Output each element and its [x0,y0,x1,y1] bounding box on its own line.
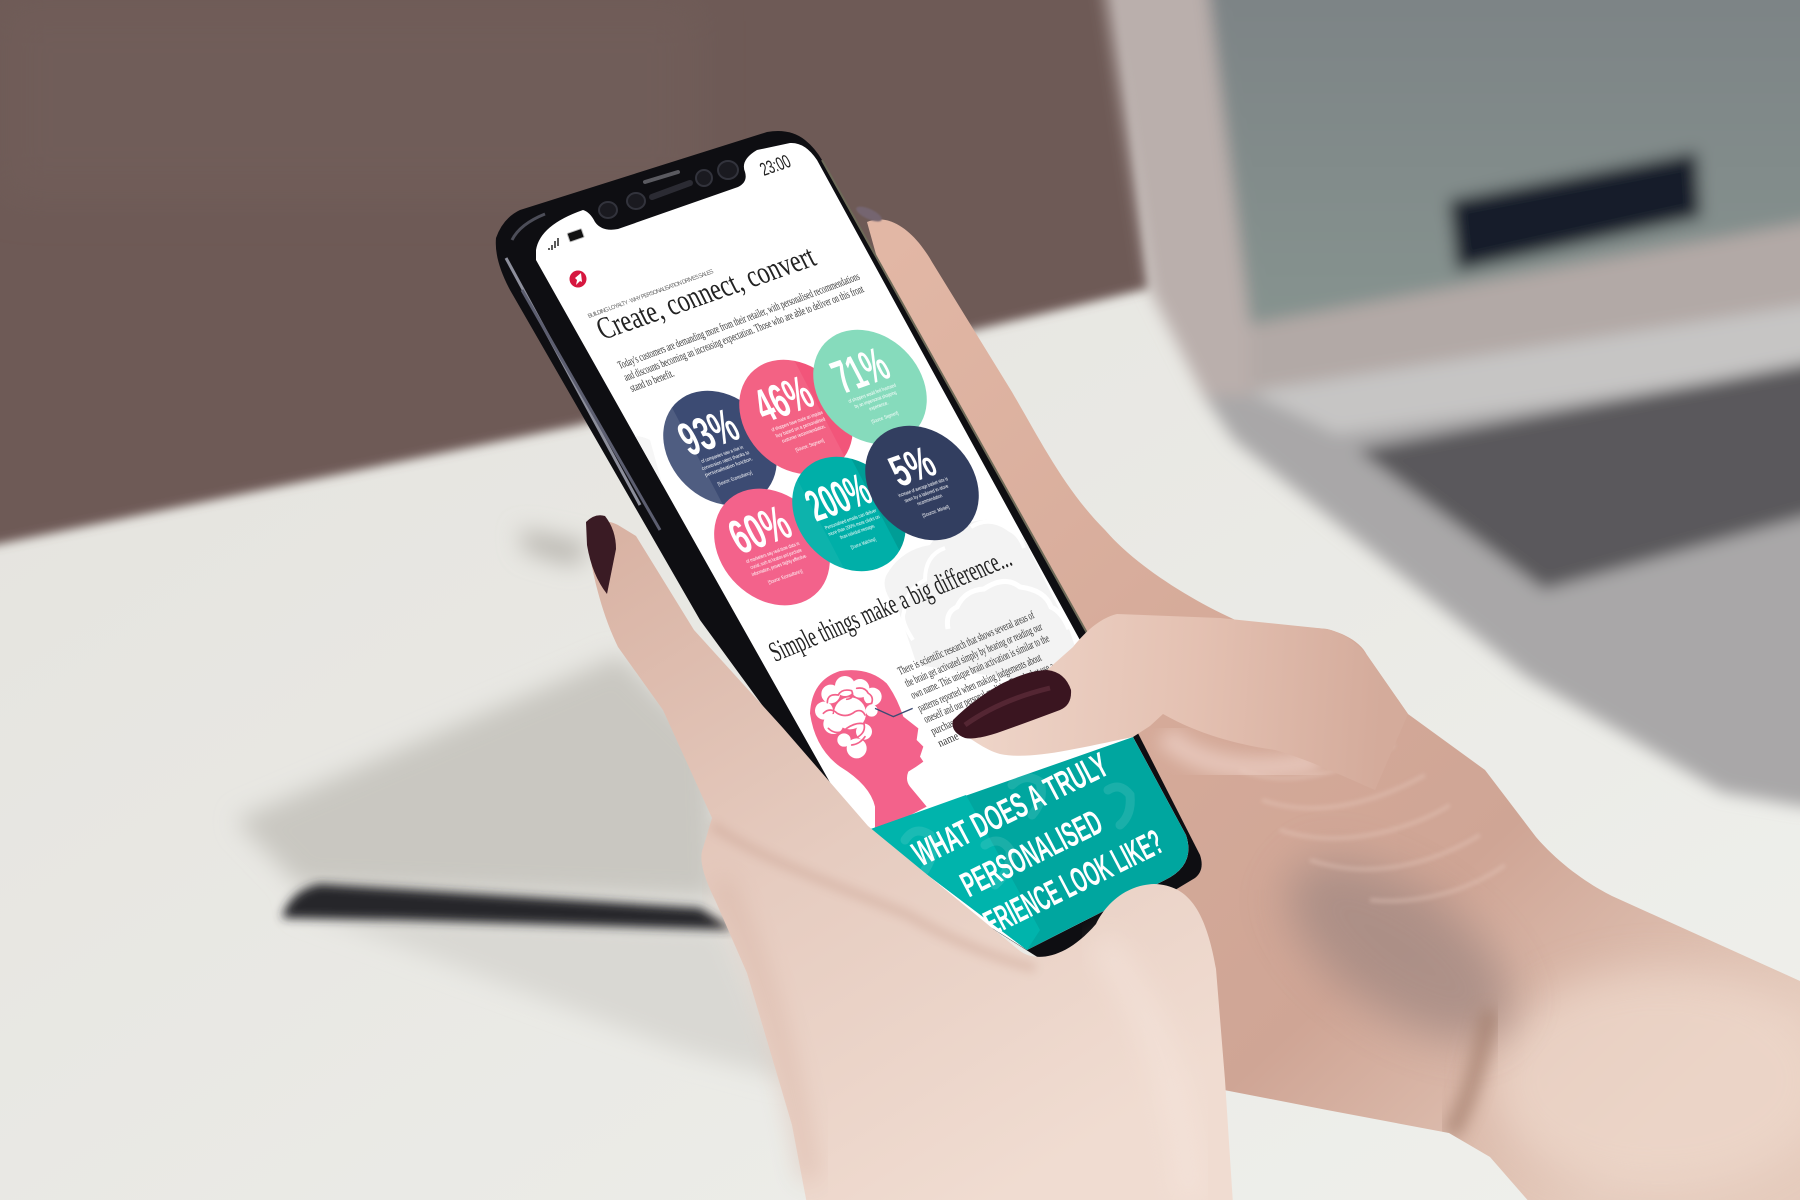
stat bubble: 200%: [Source: Mailchimp] [850,537,877,551]
banner heading: WHAT DOES A TRULY [906,746,1115,874]
intro paragraph: stand to benefit. [628,367,677,395]
title: Create, connect, convert [590,239,822,347]
research paragraph: purchaser's name in messages will capture [929,676,1054,738]
connector line [875,708,913,717]
phone body [496,131,1202,965]
stat bubble: 71%: [Source: Segment] [870,410,900,425]
phone screen [536,143,1188,950]
fold under thumb [1165,735,1320,768]
intro paragraph: Today's customers are demanding more from their retailer, with personalised recommendations [616,271,862,372]
brain lobes [815,676,882,758]
intro paragraph: and discounts becoming an increasing expectation. Those who are able to deliver on this front [622,283,867,384]
stat bubble: 60%: crucial, such as location and purchase [749,547,803,571]
stat bubble: 60%: information, proves highly effective. [751,553,808,578]
status bar: signal, battery and clock [549,152,795,250]
banner heading: PERSONALISED [954,803,1109,905]
stat bubble: 46% [739,360,852,474]
research paragraph: name can engage the customer [936,692,1052,750]
pen on desk [282,884,735,930]
stat bubble: 60%: 60% [719,495,800,564]
research paragraph: oneself and our personal qualities. Brands that use a [922,660,1056,726]
stat bubble: 5%: seen by a tailored in-store [903,483,950,504]
research paragraph: own name. This unique brain activation is similar to the [909,632,1052,702]
watermark brain [635,436,1074,678]
stat bubble: 200%: those individual messages [839,523,876,541]
stat bubble: 5%: [Source: Mintel] [921,504,951,519]
stat bubble: 200%: Personalised emails can deliver [824,508,878,532]
research paragraph: There is scientific research that shows several areas of [896,609,1037,678]
index fingernail [586,515,616,594]
wrist highlight [1490,970,1800,1190]
research paragraph: the brain get activated simply by hearing or reading our [903,621,1045,690]
wrist crease [1450,1010,1490,1135]
left hand holding phone [586,515,1234,1200]
stat bubble: 200%: more than 200% more clicks on [827,514,881,538]
stat bubble: 5%: recommendation [916,493,944,507]
stat bubble: 46%: of shoppers have made an impulse [770,410,824,433]
notebook on desk [236,530,790,1080]
research paragraph [896,609,1056,750]
finger crease shading [712,825,1035,968]
banner heading: EXPERIENCE LOOK LIKE? [945,823,1170,959]
fingernail tip behind phone [854,204,884,224]
stat bubble: 46%: customer recommendation. [781,424,827,445]
stat bubble: 46%: buy based on a personalised [775,416,827,439]
stat bubble: 46%: 46% [744,365,822,433]
stat bubble: 93%: 93% [669,398,747,466]
stat bubble: 93% [663,390,776,505]
palm wrinkles [1250,770,1504,904]
stat bubble: 71%: 71% [822,337,898,404]
research paragraph: patterns reported when making judgements about [916,651,1044,715]
intro paragraph [616,271,867,395]
stat bubble: 5%: increase of average basket size is [897,476,950,499]
stat bubble: 71% [813,330,927,444]
palm shadow [1276,846,1530,1057]
stat bubble: 200% [792,456,906,572]
stat bubble: 93%: personalisation function. [704,456,754,478]
faint question marks [905,778,1130,885]
stat bubble: 71%: by an impersonal shopping [853,390,898,410]
section heading: Simple things make a big difference... [763,541,1016,668]
stat bubble: 71%: experience. [868,400,890,413]
logo [570,270,586,288]
stat bubble: 93%: conversion rates thanks to [701,450,751,472]
stat bubble: 71%: of shoppers would feel frustrated [847,382,898,405]
eyebrow text: BUILDING LOYALTY · WHY PERSONALISATION DRIVES SALES [587,269,715,320]
front camera and speaker [599,161,738,218]
stat bubble: 93%: of companies saw a rise in [700,444,745,465]
bottom banner [868,737,1188,959]
stat bubble: 5% [865,426,979,540]
stat bubble: 5%: 5% [881,437,944,496]
banner heading [910,752,1162,932]
stat bubble: 46%: [Source: Segment] [794,438,826,454]
stat bubble: 60%: [Source: Econsultancy] [767,568,804,586]
stat bubble: 60% [714,488,830,606]
stat bubble: 93%: [Source: Econsultancy] [717,470,754,488]
right thumb over screen [952,614,1408,790]
thumbnail [952,670,1071,738]
laptop in background [1100,0,1800,812]
stat bubble: 200%: 200% [797,465,880,531]
hand behind phone: fingers and palm [854,204,1800,1200]
status bar: signal, battery and clock: 23:00 [757,152,795,180]
stat bubble: 60%: of marketers say real-time data is [745,541,801,565]
icon: head silhouette with brain [810,670,927,833]
